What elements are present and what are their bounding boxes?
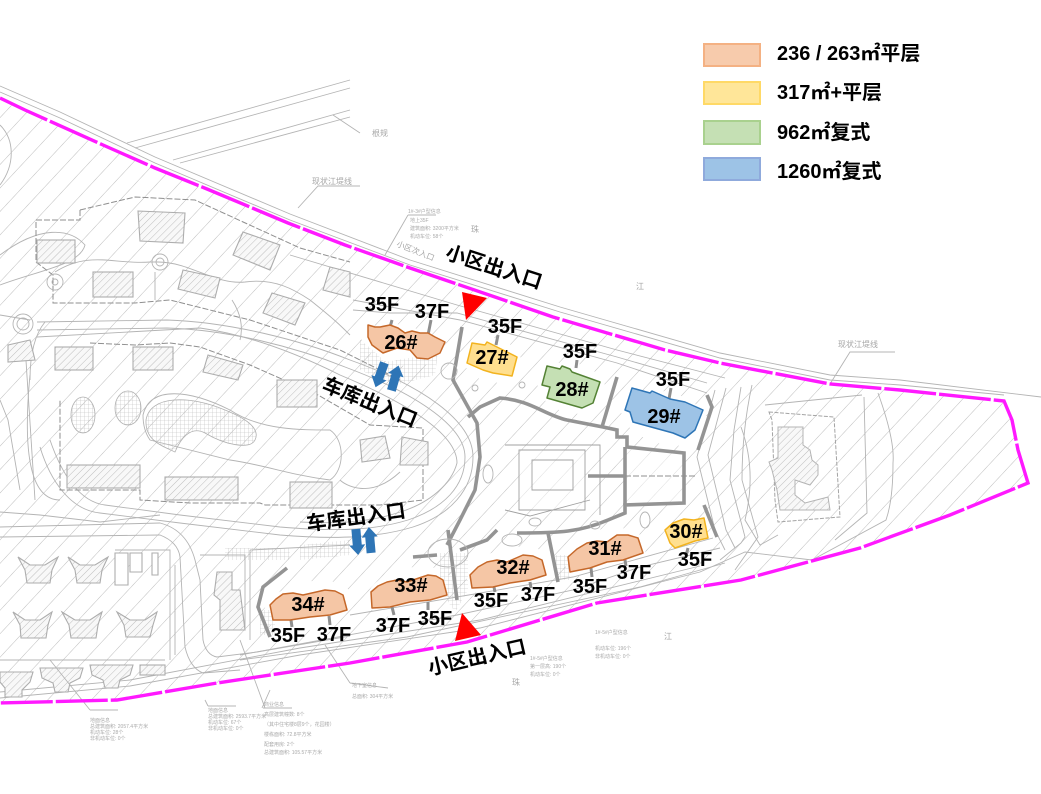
unit 34# (270, 590, 347, 620)
landscape walkways (258, 327, 717, 637)
cad annotations: 机动车位: 0个 (530, 671, 561, 678)
cad annotations: 珠 (512, 677, 520, 687)
cad annotations: 配套用房: 2个 (264, 741, 295, 748)
cad annotations: 江 (664, 632, 672, 641)
floor labels: 35F (563, 341, 597, 363)
unit 32# (470, 555, 546, 588)
label: community entrance north: 小区出入口 (443, 241, 545, 294)
cad annotations: （其中住宅楼8层9个，花园楼） (264, 721, 335, 728)
cad annotations: 地上35F (410, 217, 429, 224)
cad annotations: 现状江堤线 (312, 176, 352, 186)
cad annotations: 总建筑面积: 2057.4平方米 (90, 723, 148, 730)
legend swatch: 317 (704, 82, 760, 104)
cad annotations: 江 (636, 282, 644, 291)
floor labels: 35F (271, 625, 305, 647)
cad annotations: 地面信息 (208, 707, 228, 714)
legend swatch: 236/263 (704, 44, 760, 66)
unit 28# (542, 366, 600, 408)
floor labels: 35F (678, 549, 712, 571)
floor labels: 35F (488, 316, 522, 338)
unit 30# (665, 518, 708, 548)
unit 27# (467, 342, 517, 376)
lake and ponds (71, 391, 256, 452)
unit 33# (371, 575, 447, 608)
floor labels: 35F (573, 576, 607, 598)
legend label: 1260: 1260㎡复式 (777, 160, 882, 183)
connector stubs (291, 320, 688, 627)
cad annotations: 现状江堤线 (838, 339, 878, 349)
floor labels: 37F (617, 562, 651, 584)
cad annotations: 小区次入口 (395, 239, 436, 263)
legend (704, 42, 920, 183)
cad annotations: 地面信息 (90, 717, 110, 724)
dashed lots (36, 197, 423, 505)
cad annotations: 非机动车位: 0个 (208, 725, 244, 732)
legend label: 962: 962㎡复式 (777, 121, 870, 144)
building labels: 29# (647, 406, 681, 428)
unit 26# (368, 325, 445, 359)
building labels: 27# (475, 347, 509, 369)
hatched site area (0, 105, 1024, 702)
building labels: 34# (291, 594, 325, 616)
building labels: 26# (384, 332, 418, 354)
cad annotations: 总面积: 304平方米 (352, 693, 393, 700)
red entrance marker: north (462, 292, 487, 320)
legend swatch: 962 (704, 121, 760, 144)
red entrance marker: south (455, 613, 481, 641)
icon: garage arrows north (368, 360, 406, 393)
legend swatch: 1260 (704, 158, 760, 180)
cad annotations: 楼栋面积: 72.8平方米 (264, 731, 312, 738)
floor labels: 35F (474, 590, 508, 612)
floor labels (271, 294, 712, 647)
unit 31# (568, 535, 643, 572)
label: community entrance south: 小区出入口 (426, 635, 528, 680)
floor labels: 35F (418, 608, 452, 630)
building labels: 32# (496, 557, 530, 579)
legend label: 236/263: 236 / 263㎡平层 (777, 42, 920, 65)
cad annotations: 总建筑面积: 105.57平方米 (264, 749, 322, 756)
floor labels: 35F (656, 369, 690, 391)
cad annotations: 非机动车位: 0个 (90, 735, 126, 742)
building labels (291, 332, 703, 616)
floor labels: 37F (317, 624, 351, 646)
cad annotations: 根规 (372, 128, 388, 138)
cad annotations: 地下室信息 (352, 682, 377, 689)
cad annotations: 建筑面积: 3200平方米 (410, 225, 459, 232)
floor labels: 37F (521, 584, 555, 606)
cad annotations: 总建筑面积: 2593.7平方米 (208, 713, 266, 720)
cad annotations: 非机动车位: 0个 (595, 653, 631, 660)
cad annotations: 机动车位: 67个 (208, 719, 241, 726)
label: garage entrance north: 车库出入口 (319, 372, 421, 432)
paved grid areas (225, 340, 570, 635)
cad annotations: 1#-5#户型信息 (595, 629, 628, 636)
site boundary line (0, 98, 1028, 703)
building labels: 33# (394, 575, 428, 597)
clubhouse (505, 445, 600, 516)
cad annotations: 高层建筑幢数: 8个 (264, 711, 305, 718)
cad annotations: 商业信息 (264, 701, 284, 708)
garden paths (13, 254, 400, 489)
legend label: 317: 317㎡+平层 (777, 81, 882, 104)
road lines (0, 80, 1041, 698)
unhatched pads (259, 317, 715, 640)
building labels: 30# (669, 521, 703, 543)
cad annotations: 机动车位: 28个 (90, 729, 123, 736)
neighbouring residential blocks (0, 211, 428, 697)
unit 29# (625, 388, 703, 438)
floor labels: 37F (376, 615, 410, 637)
cad annotations: 1#-3#户型信息 (408, 208, 441, 215)
cad annotations: 机动车位: 58个 (410, 233, 443, 240)
cad annotations: 珠 (471, 224, 479, 234)
cad annotations: 1#-5#户型信息 (530, 655, 563, 662)
label: garage entrance south: 车库出入口 (305, 498, 407, 536)
cad annotations (50, 128, 878, 756)
cad annotations: 第一层高: 190个 (530, 663, 566, 670)
building labels: 28# (555, 379, 589, 401)
icon: garage arrows south (348, 526, 379, 556)
villa (741, 412, 840, 545)
cad annotations: 机动车位: 196个 (595, 645, 631, 652)
building labels: 31# (588, 538, 622, 560)
floor labels: 35F (365, 294, 399, 316)
floor labels: 37F (415, 301, 449, 323)
